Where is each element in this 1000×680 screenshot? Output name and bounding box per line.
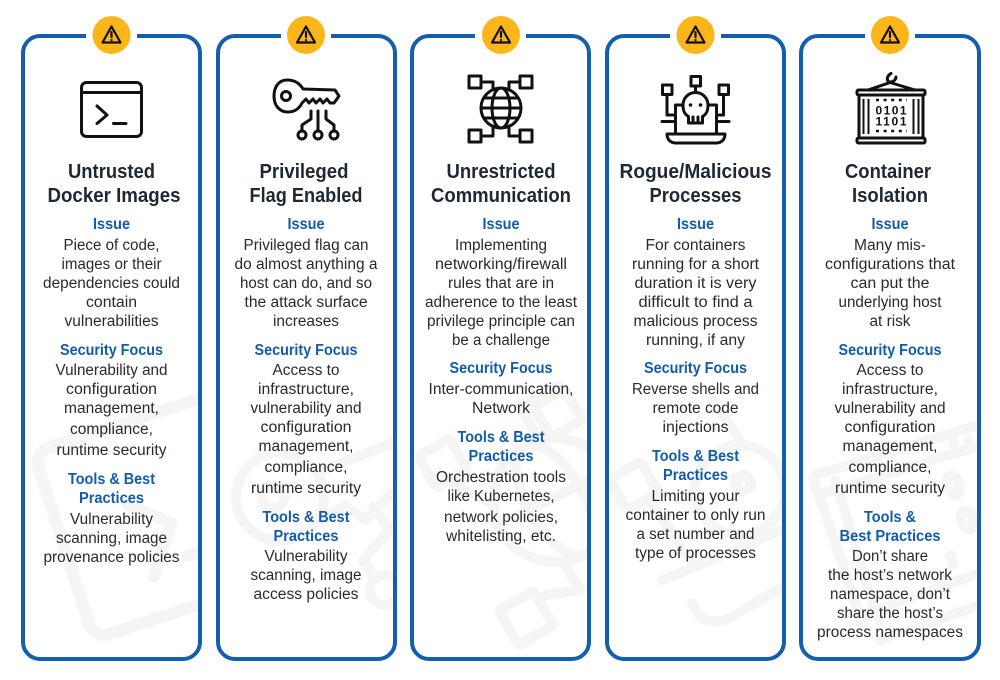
section: tools and best practices [436,429,566,545]
heading [48,161,180,207]
section: tools and best practices: Vulnerability [264,548,348,565]
panel: container isolation [801,16,1000,659]
section: security focus: Security Focus [60,342,163,359]
section: issue: can put the [850,275,930,292]
section: issue: configurations that [825,256,956,273]
watermark: data container [808,420,977,645]
section: issue: underlying host [838,294,942,311]
section: security focus: configuration [66,381,157,398]
section: tools and best practices: Practices [79,490,144,507]
watermark: terminal window [32,393,198,640]
section: tools and best practices: Vulnerability [70,511,153,528]
section: issue: running for a short [632,256,760,273]
heading: Rogue/Malicious [620,161,772,183]
section: issue: contain [86,294,137,311]
section: security focus: Vulnerability and [56,362,168,379]
heading: Processes [650,185,742,207]
section: issue: privilege principle can [427,313,575,330]
section: tools and best practices: namespace, don’t [830,586,951,603]
icon: skull on laptop [662,76,729,143]
section: issue: difficult to find a [638,294,753,311]
section: tools and best practices: the host’s network [828,567,952,584]
section: issue: at risk [870,313,911,330]
section: issue: be a challenge [452,332,550,349]
section: issue: rules that are in [448,275,554,292]
section: security focus [834,342,946,497]
watermark: globe and nodes [414,380,587,649]
heading [845,161,931,207]
section: issue: host can do, and so [240,275,372,292]
watermark: key and circuit [236,440,400,605]
heading: Docker Images [48,185,180,207]
section: tools and best practices: Tools & Best [458,429,544,446]
section: tools and best practices: Practices [663,467,728,484]
section: tools and best practices: scanning, image [250,567,362,584]
panel: unrestricted communication [410,16,591,661]
section: security focus: vulnerability and [250,400,362,417]
section: issue: Many mis- [854,237,926,254]
section: security focus: compliance, [264,459,348,476]
section: tools and best practices: Tools & [864,509,916,526]
section: issue: Issue [93,216,130,233]
section: issue [632,216,760,349]
section: tools and best practices: process namespaces [817,624,963,641]
section: security focus: Security Focus [644,360,747,377]
section: security focus: Security Focus [254,342,358,359]
section: issue: Privileged flag can [244,237,368,254]
warning badge [287,16,325,54]
watermark: skull on laptop [609,400,785,622]
section: tools and best practices: share the host’s [837,605,943,622]
section: security focus: Security Focus [450,360,552,377]
section: security focus: infrastructure, [258,381,354,398]
section: issue: the attack surface [244,294,368,311]
section: issue [825,216,956,330]
warning badge [92,16,130,54]
icon: data container: 1101 [876,114,907,128]
section: security focus [632,360,759,436]
icon: terminal window [82,82,142,136]
panel: privileged flag enabled [218,16,400,659]
icon: data container: 0101 [876,104,907,118]
section: issue [234,216,378,330]
section: issue: Issue [872,216,909,233]
section: security focus: runtime security [251,480,361,497]
section: tools and best practices: network policies, [444,509,558,526]
section: issue: Issue [482,216,520,233]
section: security focus: management, [258,438,354,455]
section: issue: Issue [677,216,714,233]
section: security focus [428,360,574,417]
section: issue: vulnerabilities [64,313,159,330]
heading: Privileged [260,161,348,183]
section: issue: Piece of code, [64,237,160,254]
section: security focus: Access to [856,362,924,379]
section: issue: For containers [646,237,746,254]
heading [431,161,571,207]
section: tools and best practices: a set number and [636,526,754,543]
section: security focus: injections [662,419,729,436]
section: security focus: Network [472,400,530,417]
section: tools and best practices: container to only run [626,507,766,524]
section: issue [43,216,180,330]
section: tools and best practices: Tools & Best [68,471,155,488]
section: security focus: Security Focus [838,342,942,359]
heading: Unrestricted [446,161,556,183]
section: tools and best practices: Orchestration tools [436,469,566,486]
section: tools and best practices [250,509,362,603]
section: tools and best practices: Best Practices [840,528,940,545]
section: security focus: Reverse shells and [632,381,759,398]
heading: Communication [431,185,571,207]
section: issue: Implementing [455,237,547,254]
section: issue: Issue [288,216,325,233]
section: security focus: remote code [652,400,738,417]
icon: skull eyes [689,103,702,107]
section: tools and best practices: provenance policies [44,549,180,566]
warning badge [871,16,909,54]
section: issue [425,216,578,349]
section: security focus: vulnerability and [834,400,946,417]
section: security focus: Inter-communication, [428,381,574,398]
section: security focus [250,342,362,497]
section: security focus [56,342,168,459]
icon: key and circuit [274,80,339,139]
section: issue: do almost anything a [234,256,378,273]
section: issue: duration it is very [634,275,757,292]
section: tools and best practices: Practices [468,448,534,465]
warning badge [482,16,520,54]
heading [250,161,362,207]
section: tools and best practices: Practices [274,528,338,545]
section: tools and best practices: Don’t share [852,548,928,565]
section: security focus: compliance, [848,459,932,476]
section: tools and best practices: Tools & Best [262,509,350,526]
section: tools and best practices: scanning, image [56,530,167,547]
heading [620,161,772,207]
section: security focus: runtime security [835,480,945,497]
section: security focus: management, [842,438,938,455]
section: issue: adherence to the least [425,294,578,311]
heading: Isolation [852,185,928,207]
icon: data container [857,74,925,143]
section: tools and best practices: type of processes [635,545,756,562]
section: tools and best practices [817,509,963,641]
section: tools and best practices: like Kubernetes, [448,488,554,505]
section: security focus: management, [64,400,159,417]
section: tools and best practices: access policies [254,586,359,603]
section: issue: networking/firewall [435,256,567,273]
section: issue: malicious process [634,313,758,330]
section: tools and best practices: whitelisting, etc. [445,528,556,545]
section: security focus: compliance, [70,421,153,438]
warning badge [676,16,714,54]
panel: untrusted docker images [21,16,202,661]
section: tools and best practices: Limiting your [652,488,740,505]
section: issue: running, if any [646,332,745,349]
section: issue: dependencies could [43,275,180,292]
section: security focus: configuration [844,419,936,436]
section: issue: increases [273,313,339,330]
icon: globe and nodes [469,76,532,142]
heading: Untrusted [68,161,155,183]
section: security focus: configuration [260,419,352,436]
section: issue: images or their [62,256,162,273]
section: security focus: infrastructure, [842,381,938,398]
section: tools and best practices [44,471,180,566]
heading: Flag Enabled [250,185,362,207]
section: tools and best practices [626,448,766,562]
section: security focus: Access to [272,362,340,379]
heading: Container [845,161,931,183]
panel: rogue/malicious processes [607,16,785,659]
section: tools and best practices: Tools & Best [652,448,739,465]
section: security focus: runtime security [56,442,167,459]
